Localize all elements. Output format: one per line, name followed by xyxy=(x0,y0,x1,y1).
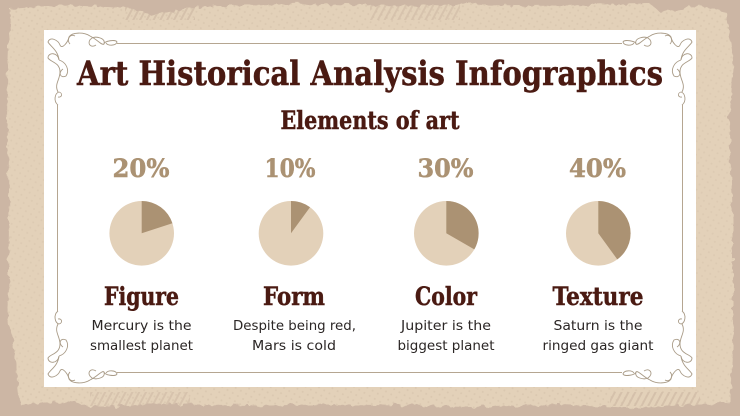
ornamental frame xyxy=(48,33,692,383)
description: Figure: smallest planet xyxy=(90,339,193,354)
label: Form: Form xyxy=(263,282,325,311)
white panel xyxy=(44,30,696,387)
column: Color xyxy=(398,154,494,354)
description: Figure xyxy=(90,319,193,354)
pie chart: 40% xyxy=(566,201,631,266)
label: Texture: Texture xyxy=(552,282,644,311)
percentage: 10%: 10% xyxy=(264,154,316,183)
column: Figure xyxy=(90,154,193,354)
description: Form: Mars is cold xyxy=(252,339,336,354)
label: Color: Color xyxy=(415,282,478,311)
column: Texture xyxy=(542,154,654,354)
percentage: 30%: 30% xyxy=(418,154,474,183)
description: Color: Jupiter is the xyxy=(400,319,491,334)
description: Texture: Saturn is the xyxy=(554,319,642,334)
percentage: 20%: 20% xyxy=(112,154,170,183)
column: Form xyxy=(233,154,356,354)
description: Color xyxy=(398,319,494,354)
pie chart: 30% xyxy=(414,201,479,266)
label: Figure: Figure xyxy=(104,282,179,311)
description: Color: biggest planet xyxy=(398,339,494,354)
description: Form xyxy=(233,319,356,354)
pie chart: 20% xyxy=(109,201,174,266)
subtitle: Elements of art xyxy=(280,106,460,135)
description: Form: Despite being red, xyxy=(233,319,356,334)
description: Figure: Mercury is the xyxy=(92,319,192,334)
pie chart: 10% xyxy=(259,201,323,266)
description: Texture xyxy=(542,319,654,354)
description: Texture: ringed gas giant xyxy=(542,339,654,354)
percentage: 40%: 40% xyxy=(569,154,626,183)
